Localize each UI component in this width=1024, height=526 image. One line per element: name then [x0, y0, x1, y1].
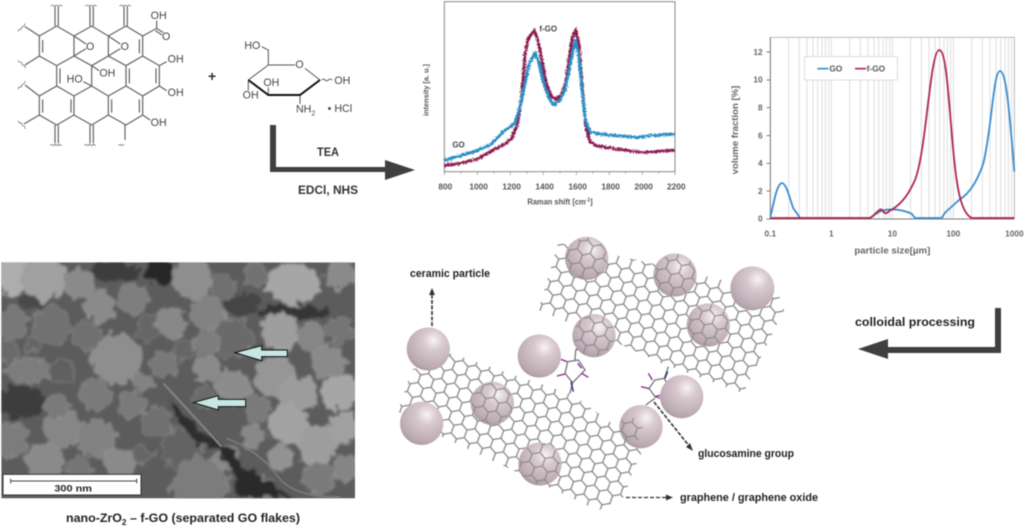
- label: glucosamine group: [654, 402, 794, 460]
- chart: particle size distribution: 10: [888, 228, 897, 238]
- chemical structure: graphene oxide: OH: [151, 10, 167, 22]
- chart: Raman spectra: 2000: [634, 181, 653, 191]
- chemical structure: glucosamine hydrochloride: O: [295, 59, 304, 71]
- lattice over spheres: [472, 238, 729, 484]
- chemical structure: glucosamine hydrochloride: [243, 40, 352, 117]
- chart: Raman spectra: 2200: [667, 181, 686, 191]
- chemical structure: glucosamine hydrochloride: HO: [244, 40, 260, 52]
- chart: particle size distribution: 6: [758, 130, 763, 140]
- chart: Raman spectra: ]: [590, 198, 593, 207]
- chart: Raman spectra: 1800: [601, 181, 620, 191]
- chemical structure: glucosamine hydrochloride: • HCl: [328, 103, 352, 115]
- chemical structure: graphene oxide: O: [162, 31, 170, 43]
- arrow: reaction to Raman chart: [270, 125, 415, 180]
- chart: particle size distribution: 100: [946, 228, 961, 238]
- graphene sheet right: [538, 243, 784, 393]
- chart: Raman spectra: Raman shift [cm: [527, 198, 589, 207]
- chemical structure: graphene oxide: O: [86, 41, 94, 53]
- chart: particle size distribution: 2: [758, 186, 763, 196]
- label: TEA: TEA: [317, 147, 339, 159]
- curve: f-GO: [444, 31, 675, 166]
- caption: nano-ZrO: [66, 511, 120, 525]
- SEM micrograph: [0, 256, 361, 513]
- plus sign: +: [208, 68, 216, 84]
- arrow: GO flake marker: [193, 396, 246, 410]
- spheres: [400, 237, 774, 486]
- chemical structure: glucosamine hydrochloride: NH: [296, 104, 311, 116]
- chart: Raman spectra: 1000: [469, 181, 488, 191]
- chart: particle size distribution: [730, 37, 1024, 255]
- chemical structure: graphene oxide: [18, 5, 184, 146]
- chart: particle size distribution: 0.1: [765, 228, 776, 238]
- chemical structure: graphene oxide: OH: [168, 87, 184, 99]
- chemical structure: glucosamine hydrochloride: OH: [243, 90, 259, 102]
- scale bar: 300 nm: [54, 483, 92, 493]
- chemical structure: glucosamine hydrochloride: OH: [263, 77, 279, 89]
- legend: f-GO: [867, 63, 886, 73]
- label: ceramic particle: [410, 268, 490, 326]
- chart: particle size distribution: 8: [758, 102, 763, 112]
- scale bar: [3, 474, 141, 495]
- label: graphene / graphene oxide: graphene / graphene oxide: [680, 492, 818, 504]
- label: glucosamine group: glucosamine group: [698, 448, 794, 460]
- arrow: GO flake marker: [235, 346, 287, 361]
- curve: GO: [444, 42, 675, 160]
- chemical structure: glucosamine hydrochloride: 2: [311, 108, 315, 117]
- chart: Raman spectra: -1: [586, 198, 590, 204]
- chart: particle size distribution: 4: [758, 158, 763, 168]
- curve: f-GO: [770, 50, 1014, 218]
- chemical structure: glucosamine hydrochloride: OH: [334, 75, 350, 87]
- chart: Raman spectra: [421, 2, 686, 207]
- glucosamine linkers: [557, 346, 672, 412]
- chart: particle size distribution: 10: [753, 75, 763, 85]
- schematic: ceramic particles on graphene sheets: [398, 230, 785, 511]
- chemical structure: graphene oxide: O: [121, 41, 129, 53]
- chart: Raman spectra: f-GO: [539, 25, 557, 34]
- chart: Raman spectra: 1400: [535, 181, 554, 191]
- chart: particle size distribution: 12: [753, 47, 763, 57]
- dark gaps: [0, 258, 327, 418]
- chart: Raman spectra: GO: [452, 140, 465, 149]
- caption: – f-GO (separated GO flakes): [127, 511, 300, 525]
- curve: GO: [770, 71, 1014, 218]
- legend: GO: [829, 63, 843, 73]
- chart: particle size distribution: 1: [829, 228, 834, 238]
- chart: particle size distribution: 0: [758, 214, 763, 224]
- chart: Raman spectra: 1200: [502, 181, 521, 191]
- chart: particle size distribution: particle size[µm]: [854, 245, 930, 255]
- chemical structure: graphene oxide: OH: [99, 68, 115, 80]
- chart: particle size distribution: volume fraction [%]: [730, 86, 740, 174]
- chemical structure: graphene oxide: HO: [67, 74, 83, 86]
- grains: [1, 262, 356, 498]
- label: ceramic particle: ceramic particle: [410, 268, 490, 280]
- chart: Raman spectra: 1600: [568, 181, 587, 191]
- chart: particle size distribution: 1000: [1005, 228, 1024, 238]
- chart: Raman spectra: 800: [438, 181, 453, 191]
- chemical structure: graphene oxide: OH: [151, 117, 167, 129]
- legend: [804, 57, 897, 80]
- graphene sheet left: [398, 353, 645, 511]
- arrow: colloidal processing: [858, 308, 1001, 359]
- chemical structure: graphene oxide: OH: [168, 53, 184, 65]
- label: colloidal processing: colloidal processing: [855, 315, 975, 329]
- chart: Raman spectra: intensity [a. u.]: [421, 64, 430, 116]
- label: EDCl, NHS: EDCl, NHS: [298, 185, 358, 197]
